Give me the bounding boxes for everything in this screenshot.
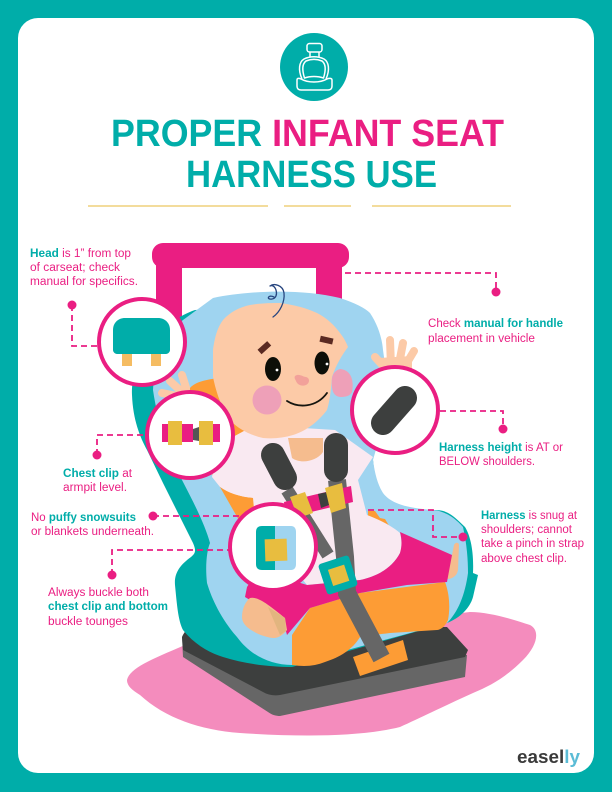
- seat padding light blue: [153, 292, 468, 665]
- neck: [288, 438, 323, 461]
- title: HARNESS USE: [186, 154, 437, 196]
- text: head callout: manual for specifics.: [30, 276, 138, 288]
- easelly logo: easelly: [517, 747, 580, 767]
- text: buckle callout: buckle tounges: [48, 616, 128, 628]
- left foot: [242, 598, 287, 638]
- title: [111, 113, 504, 196]
- text: snowsuits callout: [31, 512, 154, 538]
- text: snug harness callout: above chest clip.: [481, 553, 567, 565]
- magnifier: harness height: [352, 367, 438, 453]
- head: [213, 303, 348, 438]
- magnifier: chest clip: [147, 392, 233, 478]
- pink floor shadow: [127, 612, 536, 735]
- white onesie: [212, 425, 402, 585]
- text: harness height callout: BELOW shoulders.: [439, 456, 535, 468]
- right foot: [447, 543, 459, 579]
- icon: car seat badge: [280, 33, 348, 101]
- text: snug harness callout: shoulders; cannot: [481, 524, 573, 536]
- harness shoulder pads: [273, 445, 336, 478]
- text: handle callout: [428, 318, 563, 345]
- text: snowsuits callout: or blankets underneath.: [31, 526, 154, 538]
- orange buckle tab: [353, 640, 408, 676]
- harness straps: [287, 480, 382, 658]
- text: handle callout: Check manual for handle: [428, 318, 563, 330]
- callout leader lines: [68, 273, 508, 580]
- magnifier: head rest: [99, 299, 185, 385]
- text: buckle callout: chest clip and bottom: [48, 601, 168, 613]
- title: PROPER INFANT SEAT: [111, 113, 504, 155]
- text: buckle callout: Always buckle both: [48, 587, 149, 599]
- illustration: baby in infant car seat: [127, 243, 536, 735]
- text: chest clip callout: [63, 468, 133, 494]
- orange shoulder and torso accents: [190, 378, 391, 529]
- text: harness height callout: [439, 442, 563, 468]
- orange legs: [292, 582, 449, 666]
- text: harness height callout: Harness height is AT or: [439, 442, 563, 454]
- seat base: [182, 625, 468, 716]
- text: buckle callout: [48, 587, 168, 628]
- text: handle callout: placement in vehicle: [428, 333, 535, 345]
- decorative rules under title: [88, 205, 511, 207]
- text: snug harness callout: Harness is snug at: [481, 510, 578, 522]
- magnifier: buckle: [230, 504, 316, 590]
- magenta pants: [245, 532, 452, 635]
- right hand: [375, 340, 414, 372]
- text: snug harness callout: take a pinch in strap: [481, 538, 584, 550]
- face: [252, 285, 353, 414]
- text: chest clip callout: armpit level.: [63, 482, 127, 494]
- text: head callout: Head is 1” from top: [30, 248, 131, 260]
- text: snowsuits callout: No puffy snowsuits: [31, 512, 136, 524]
- crotch buckle: [318, 555, 358, 595]
- chest clip on harness: [284, 483, 353, 518]
- text: snug harness callout: [481, 510, 584, 565]
- orange left hip accent: [220, 487, 253, 522]
- text: head callout: of carseat; check: [30, 262, 120, 274]
- carrier handle: [152, 243, 349, 335]
- text: head callout: [30, 248, 138, 288]
- text: chest clip callout: Chest clip at: [63, 468, 133, 480]
- left hand: [162, 375, 198, 397]
- seat shell teal: [132, 305, 478, 667]
